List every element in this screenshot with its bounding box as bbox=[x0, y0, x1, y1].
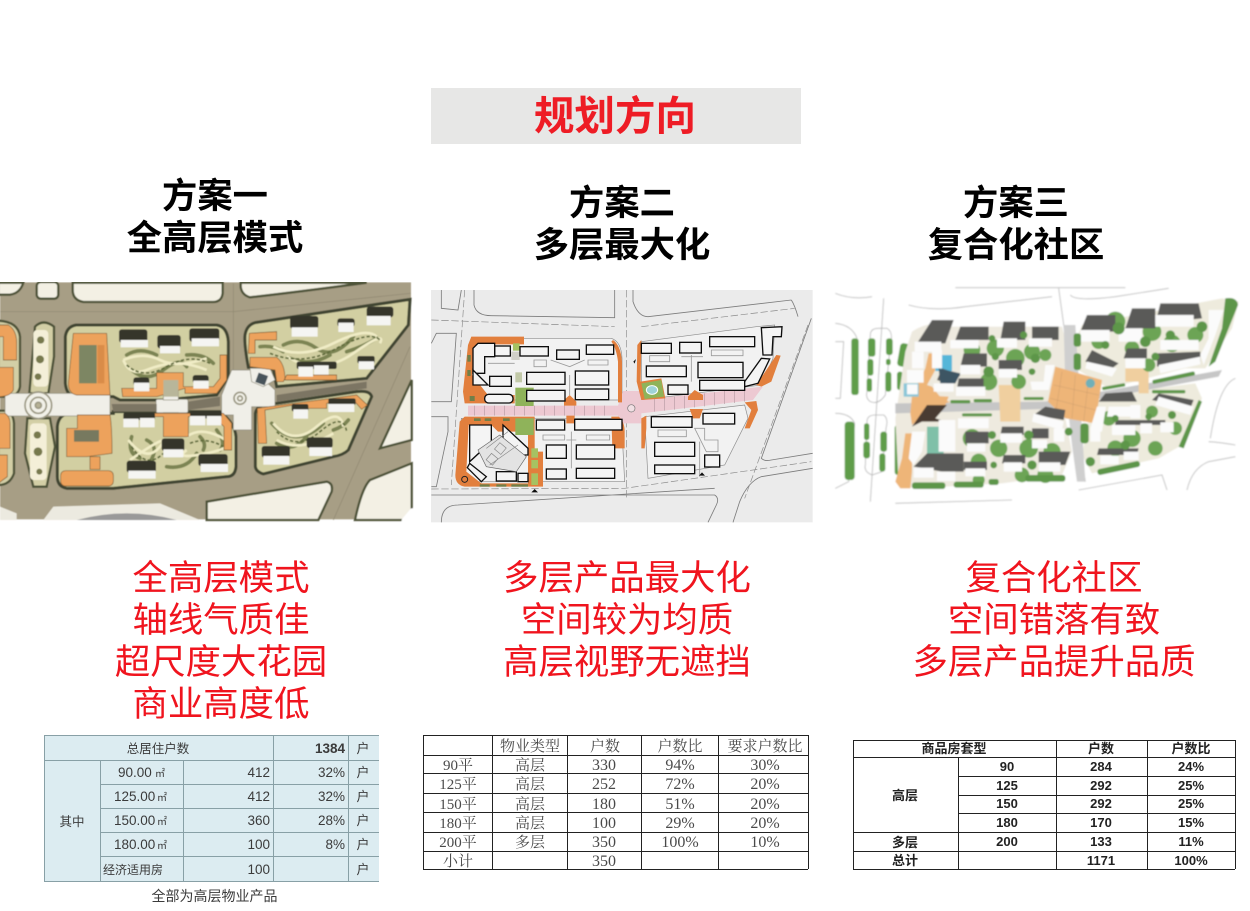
table: scheme one unit mix: 412 bbox=[247, 789, 270, 804]
building shadows bbox=[914, 303, 1202, 472]
blocks bbox=[57, 299, 410, 488]
table: scheme two unit mix: 户数比 bbox=[657, 738, 703, 755]
site fill bbox=[458, 325, 775, 482]
table: scheme three unit mix: 总计 bbox=[892, 853, 918, 868]
table: scheme three unit mix: 292 bbox=[1090, 796, 1112, 811]
table: scheme two unit mix: 高层 bbox=[515, 756, 545, 774]
table: scheme one unit mix: 32% bbox=[318, 789, 345, 804]
table: scheme one unit mix bbox=[44, 735, 379, 904]
table: scheme three unit mix: 150 bbox=[996, 796, 1018, 811]
pink axis bbox=[468, 387, 763, 423]
heading: scheme three bbox=[928, 184, 1104, 265]
table: scheme three unit mix: 292 bbox=[1090, 778, 1112, 793]
table: scheme three unit mix: 200 bbox=[996, 834, 1018, 849]
table: scheme two unit mix: 90平 bbox=[443, 757, 473, 774]
table: scheme two unit mix: 252 bbox=[592, 776, 616, 793]
table: scheme one unit mix: 125.00 bbox=[114, 789, 155, 804]
table: scheme one unit mix: ㎡ bbox=[157, 840, 167, 852]
table: scheme two unit mix: 72% bbox=[665, 776, 695, 793]
table: scheme two unit mix: 29% bbox=[665, 815, 695, 832]
table: scheme one unit mix: 180.00 bbox=[114, 837, 155, 852]
table: scheme three unit mix: 15% bbox=[1178, 815, 1204, 830]
road band bbox=[895, 370, 1222, 413]
text block: scheme three highlights bbox=[912, 558, 1196, 682]
heading: scheme one bbox=[127, 177, 303, 258]
table: scheme two unit mix: 180 bbox=[592, 796, 616, 813]
table: scheme three unit mix: 多层 bbox=[892, 835, 918, 850]
trees under buildings bbox=[963, 312, 1203, 486]
table: scheme two unit mix: 30% bbox=[750, 757, 780, 774]
table: scheme two unit mix: 330 bbox=[592, 757, 616, 774]
heading: scheme one: 全高层模式 bbox=[127, 219, 303, 258]
table: scheme one unit mix: 户 bbox=[356, 813, 370, 828]
table: scheme one unit mix: 其中 bbox=[59, 814, 85, 829]
text block: scheme three highlights: 复合化社区 bbox=[966, 558, 1142, 598]
table: scheme three unit mix: 户数比 bbox=[1171, 741, 1211, 756]
table: scheme one unit mix: 户 bbox=[356, 765, 370, 780]
text block: scheme one highlights bbox=[115, 558, 327, 724]
table: scheme two unit mix: 高层 bbox=[515, 795, 545, 813]
octagon block bbox=[478, 435, 526, 472]
courtyard outlines bbox=[488, 350, 743, 477]
table: scheme two unit mix: 200平 bbox=[439, 834, 477, 851]
site plan: scheme one bbox=[0, 282, 414, 522]
title banner: 规划方向 bbox=[534, 93, 696, 139]
table: scheme one unit mix: ㎡ bbox=[155, 768, 165, 780]
table: scheme three unit mix: 11% bbox=[1178, 834, 1204, 849]
table: scheme three unit mix: 90 bbox=[1000, 759, 1014, 774]
text block: scheme one highlights: 轴线气质佳 bbox=[133, 600, 309, 640]
table: scheme three unit mix bbox=[853, 740, 1236, 870]
table: scheme one unit mix: 8% bbox=[325, 837, 345, 852]
table: scheme one unit mix: 户 bbox=[356, 741, 370, 756]
table: scheme one unit mix: 100 bbox=[247, 862, 270, 877]
entrance markers bbox=[462, 359, 705, 492]
road sketch lines bbox=[835, 288, 1235, 503]
left strip and medians bbox=[0, 321, 55, 487]
table: scheme one unit mix: 360 bbox=[247, 813, 270, 828]
table: scheme three unit mix: 商品房套型 bbox=[921, 741, 987, 756]
text block: scheme two highlights: 高层视野无遮挡 bbox=[503, 642, 751, 682]
table: scheme three unit mix: 1171 bbox=[1087, 853, 1115, 868]
site plan: scheme two bbox=[431, 290, 813, 522]
table: scheme one unit mix: 150.00 bbox=[114, 813, 155, 828]
table: scheme two unit mix: 20% bbox=[750, 796, 780, 813]
orange streets bbox=[455, 337, 781, 487]
garden paths bbox=[123, 333, 381, 460]
table: scheme two unit mix: 94% bbox=[665, 757, 695, 774]
median trees bbox=[845, 338, 910, 480]
table: scheme two unit mix: 小计 bbox=[443, 853, 473, 870]
text block: scheme two highlights: 空间较为均质 bbox=[521, 600, 733, 640]
table: scheme one unit mix: ㎡ bbox=[157, 816, 167, 828]
table: scheme one unit mix: 412 bbox=[247, 765, 270, 780]
table: scheme one unit mix: 90.00 bbox=[118, 765, 152, 780]
table: scheme three unit mix: 25% bbox=[1178, 778, 1204, 793]
table: scheme three unit mix: 100% bbox=[1174, 853, 1208, 868]
table: scheme one unit mix: 32% bbox=[318, 765, 345, 780]
text block: scheme three highlights: 多层产品提升品质 bbox=[912, 642, 1196, 682]
table: scheme three unit mix: 高层 bbox=[892, 788, 918, 803]
table: scheme two unit mix: 物业类型 bbox=[500, 737, 560, 755]
garden planting bbox=[127, 337, 377, 467]
table: scheme two unit mix: 100% bbox=[661, 834, 699, 851]
table: scheme three unit mix: 170 bbox=[1090, 815, 1112, 830]
heading: scheme two: 多层最大化 bbox=[534, 226, 710, 265]
orange commercial bbox=[0, 325, 367, 486]
white plazas bbox=[5, 368, 275, 433]
table: scheme three unit mix: 户数 bbox=[1088, 741, 1114, 756]
site plan: scheme three bbox=[835, 286, 1239, 504]
table: scheme two unit mix: 150平 bbox=[439, 796, 477, 813]
table: scheme two unit mix: 51% bbox=[665, 796, 695, 813]
table: scheme one unit mix: 1384 bbox=[315, 741, 345, 756]
text block: scheme one highlights: 商业高度低 bbox=[133, 684, 309, 724]
table: scheme two unit mix: 125平 bbox=[439, 776, 477, 793]
heading: scheme one: 方案一 bbox=[162, 177, 268, 216]
table: scheme one unit mix: 100 bbox=[247, 837, 270, 852]
table: scheme three unit mix: 25% bbox=[1178, 796, 1204, 811]
table: scheme two unit mix: 20% bbox=[750, 815, 780, 832]
table: scheme one unit mix: ㎡ bbox=[157, 792, 167, 804]
heading: scheme two bbox=[534, 184, 710, 265]
table: scheme three unit mix: 133 bbox=[1090, 834, 1112, 849]
white roofs bbox=[907, 310, 1224, 481]
orange plazas bbox=[895, 353, 1149, 488]
table: scheme two unit mix: 10% bbox=[750, 834, 780, 851]
towers bbox=[119, 307, 393, 473]
table: scheme two unit mix bbox=[423, 735, 809, 870]
trees bbox=[912, 298, 1238, 489]
table: scheme two unit mix: 多层 bbox=[515, 834, 545, 851]
site ground bbox=[895, 324, 1072, 488]
table: scheme two unit mix: 高层 bbox=[515, 814, 545, 832]
table: scheme two unit mix: 户数 bbox=[590, 738, 620, 755]
table: scheme one unit mix: 28% bbox=[318, 813, 345, 828]
text block: scheme two highlights bbox=[503, 558, 751, 682]
table: scheme one unit mix: 总居住户数 bbox=[127, 741, 190, 756]
table: scheme one unit mix: 全部为高层物业产品 bbox=[152, 888, 278, 904]
table: scheme three unit mix: 24% bbox=[1178, 759, 1204, 774]
road lines bbox=[0, 283, 411, 520]
table: scheme one unit mix: 经济适用房 bbox=[103, 862, 163, 877]
table: scheme one unit mix: 户 bbox=[356, 789, 370, 804]
text block: scheme one highlights: 全高层模式 bbox=[133, 558, 309, 598]
table: scheme two unit mix: 20% bbox=[750, 776, 780, 793]
buildings bbox=[467, 327, 782, 482]
text block: scheme three highlights: 空间错落有致 bbox=[948, 600, 1160, 640]
table: scheme three unit mix: 180 bbox=[996, 815, 1018, 830]
table: scheme three unit mix: 125 bbox=[996, 778, 1018, 793]
table: scheme two unit mix: 350 bbox=[592, 834, 616, 851]
table: scheme two unit mix: 100 bbox=[592, 815, 616, 832]
table: scheme two unit mix: 350 bbox=[592, 853, 616, 870]
table: scheme two unit mix: 180平 bbox=[439, 815, 477, 832]
table: scheme one unit mix: 户 bbox=[356, 837, 370, 852]
text block: scheme two highlights: 多层产品最大化 bbox=[503, 558, 751, 598]
heading: scheme three: 复合化社区 bbox=[928, 226, 1104, 265]
table: scheme two unit mix: 高层 bbox=[515, 775, 545, 793]
text block: scheme one highlights: 超尺度大花园 bbox=[115, 642, 327, 682]
road outlines bbox=[431, 290, 813, 522]
table: scheme two unit mix: 要求户数比 bbox=[727, 738, 803, 755]
heading: scheme two: 方案二 bbox=[569, 184, 675, 223]
green gardens bbox=[511, 343, 664, 485]
heading: scheme three: 方案三 bbox=[963, 184, 1069, 223]
title banner bbox=[431, 88, 801, 144]
table: scheme three unit mix: 284 bbox=[1090, 759, 1113, 774]
table: scheme one unit mix: 户 bbox=[356, 862, 370, 877]
